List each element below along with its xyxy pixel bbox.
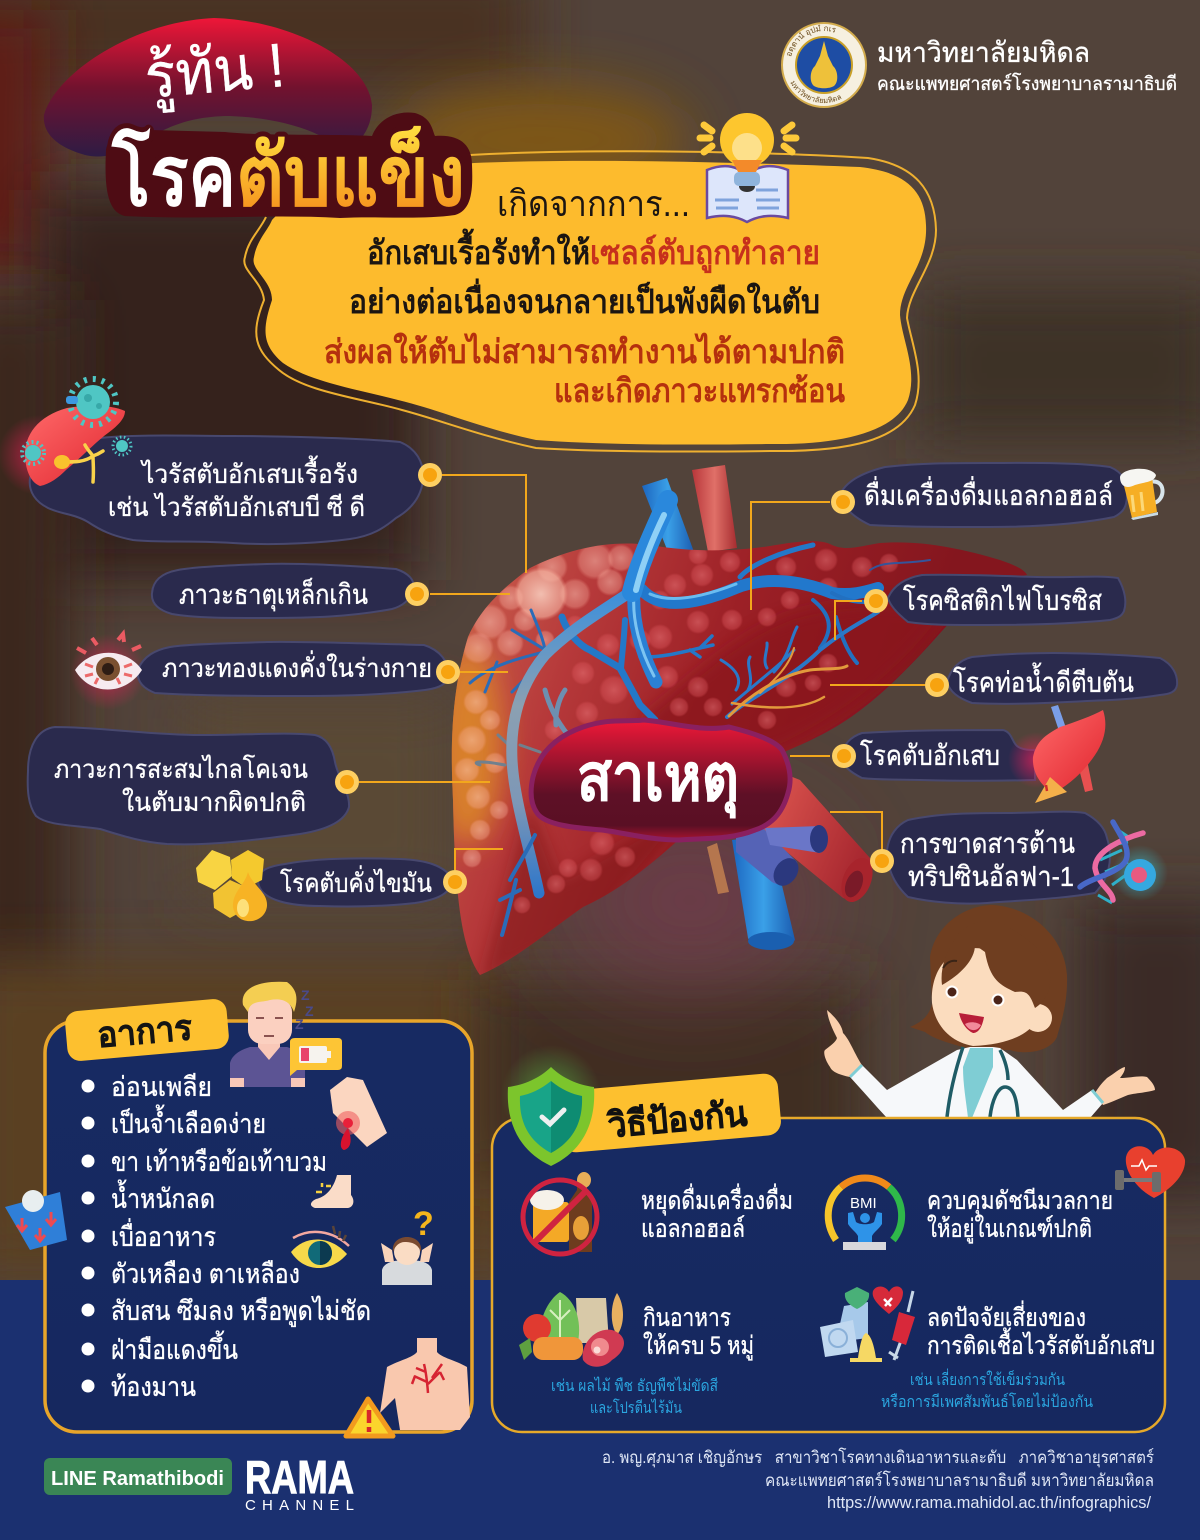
- university logo: [781, 22, 867, 108]
- icon: red eye: [75, 634, 142, 690]
- icon: tired person: Z: [305, 1003, 314, 1019]
- cause: fatty liver: [196, 850, 467, 921]
- icon: confused person: ?: [413, 1205, 434, 1243]
- prevention item: reduce hepatitis risk: ลดปัจจัยเสี่ยงของ: [927, 1300, 1086, 1332]
- icon: beer mug: [1120, 469, 1163, 520]
- prevention item: BMI: ควบคุมดัชนีมวลกาย: [927, 1187, 1113, 1216]
- symptom bullet list: ตัวเหลือง ตาเหลือง: [111, 1259, 300, 1289]
- coat: [850, 1047, 1103, 1118]
- tab: อาการ: [64, 998, 230, 1062]
- cause: hepatitis: [832, 705, 1105, 803]
- icon: liver with virus: [22, 379, 131, 486]
- heading: รู้ทัน !: รู้ทัน !: [142, 31, 288, 114]
- yellow cause panel: [244, 151, 936, 452]
- university name: คณะแพทยศาสตร์โรงพยาบาลรามาธิบดี: [877, 72, 1177, 95]
- icon: tired person: [230, 982, 342, 1087]
- liver body: [452, 541, 1027, 975]
- icon: warning triangle: [346, 1399, 393, 1436]
- icon: yellow eye: [291, 1226, 349, 1268]
- prevention item: food groups: [519, 1292, 754, 1417]
- university name: [877, 37, 1177, 95]
- cause: iron overload: [152, 564, 429, 618]
- prevention item: BMI: [828, 1146, 1185, 1250]
- icon: DNA and cell: [1080, 822, 1168, 903]
- callout: สาเหตุ: [531, 720, 790, 840]
- liver shading and lobules: [452, 544, 898, 974]
- icon: BMI gauge: [828, 1178, 902, 1250]
- icon: weight scale: [5, 1190, 67, 1250]
- cause: glycogen storage: ในตับมากผิดปกติ: [122, 787, 306, 817]
- scrubs: [963, 1048, 993, 1118]
- prevention item: stop alcohol: [523, 1172, 793, 1254]
- cause text block: [324, 183, 845, 409]
- connector lines: [359, 475, 925, 870]
- prevention item: reduce hepatitis risk: เช่น เลี่ยงการใช้เข็มร่วมกัน: [910, 1368, 1065, 1389]
- symptom bullet list: [82, 1072, 371, 1402]
- pointing hand: [824, 1010, 862, 1077]
- icon: no alcohol: [523, 1172, 597, 1254]
- aorta top: [692, 465, 737, 552]
- heading: โรคตับแข็ง: ตับแข็ง: [236, 125, 465, 223]
- tab: วิธีป้องกัน: [558, 1073, 782, 1153]
- face: [932, 948, 1036, 1046]
- icon: risk reduction: [820, 1286, 915, 1362]
- cause: glycogen storage: [28, 727, 359, 844]
- lower blue vein: [732, 835, 795, 949]
- icon: chest with spider veins: [380, 1338, 470, 1430]
- cause: glycogen storage: ภาวะการสะสมไกลโคเจน: [54, 754, 308, 784]
- cause text block: เกิดจากการ...: [497, 183, 690, 224]
- icon: swollen foot: [311, 1175, 353, 1208]
- RAMA Channel logo: [245, 1451, 354, 1514]
- doctor illustration: [824, 905, 1155, 1118]
- icon: BMI gauge: BMI: [850, 1195, 877, 1212]
- cause: iron overload: ภาวะธาตุเหล็กเกิน: [179, 577, 368, 612]
- panel: prevention: [492, 1045, 1185, 1432]
- open hand: [1095, 1067, 1155, 1105]
- LINE badge: [44, 1458, 232, 1495]
- cause: alcohol: ดื่มเครื่องดื่มแอลกอฮอล์: [864, 476, 1113, 511]
- cause text block: และเกิดภาวะแทรกซ้อน: [554, 372, 845, 409]
- symptom bullet list: สับสน ซึมลง หรือพูดไม่ชัด: [111, 1296, 371, 1327]
- liver illustration: [434, 465, 1027, 985]
- icon: healthy food: [519, 1292, 624, 1367]
- vena cava top: [642, 478, 694, 552]
- stethoscope: [947, 1047, 1018, 1118]
- credits: https://www.rama.mahidol.ac.th/infographics/: [827, 1493, 1151, 1512]
- prevention item: food groups: ให้ครบ 5 หมู่: [643, 1331, 754, 1361]
- symptom bullet list: เป็นจ้ำเลือดง่าย: [111, 1104, 266, 1139]
- prevention item: stop alcohol: แอลกอฮอล์: [641, 1215, 745, 1243]
- credits: คณะแพทยศาสตร์โรงพยาบาลรามาธิบดี มหาวิทยาลัยมหิดล: [765, 1470, 1154, 1490]
- credits: [602, 1447, 1154, 1512]
- icon: bruised hand: [330, 1077, 387, 1150]
- cause: cystic fibrosis: โรคซิสติกไฟโบรซิส: [903, 584, 1102, 616]
- cause: alpha-1 antitrypsin deficiency: ทริปซินอัลฟา-1: [908, 861, 1074, 892]
- cause text block: อย่างต่อเนื่องจนกลายเป็นพังผืดในตับ: [349, 278, 820, 320]
- tab: วิธีป้องกัน: วิธีป้องกัน: [605, 1094, 749, 1146]
- symptom bullet list: น้ำหนักลด: [111, 1179, 215, 1214]
- icon: tired person: Z: [301, 987, 310, 1003]
- icon: liver with warning: [1008, 705, 1105, 803]
- cause: hepatitis: โรคตับอักเสบ: [860, 739, 1000, 771]
- symptom bullet list: ฝ่ามือแดงขึ้น: [111, 1330, 238, 1365]
- university logo: อตฺตานํ อุปมํ กเร: [787, 24, 836, 56]
- brown bile duct: [707, 843, 729, 894]
- cause: alpha-1 antitrypsin deficiency: การขาดสารต้าน: [900, 828, 1075, 859]
- cause text block: ส่งผลให้ตับไม่สามารถทำงานได้ตามปกติ: [324, 332, 845, 370]
- cause: alcohol: [831, 463, 1163, 527]
- heading: โรคตับแข็ง: โรค: [111, 128, 236, 223]
- cause: alpha-1 antitrypsin deficiency: [870, 812, 1168, 904]
- RAMA Channel logo: RAMA: [245, 1451, 354, 1503]
- symptom bullet list: ขา เท้าหรือข้อเท้าบวม: [111, 1147, 327, 1177]
- heading: โรคตับแข็ง: [106, 112, 472, 223]
- prevention item: BMI: ให้อยู่ในเกณฑ์ปกติ: [927, 1214, 1092, 1244]
- panel: symptoms: [5, 982, 472, 1436]
- tab: อาการ: อาการ: [96, 1008, 194, 1055]
- icon: confused person: [381, 1205, 434, 1285]
- title banner shape: [44, 18, 372, 156]
- back hair: [910, 905, 1067, 1052]
- icon: light bulb and book: [700, 113, 796, 222]
- cause: biliary obstruction: โรคท่อน้ำดีตีบตัน: [953, 662, 1134, 698]
- prevention item: reduce hepatitis risk: การติดเชื้อไวรัสตับอักเสบ: [927, 1327, 1155, 1360]
- cause: copper accumulation: [70, 634, 460, 710]
- prevention item: reduce hepatitis risk: หรือการมีเพศสัมพันธ์โดยไม่ป้องกัน: [881, 1392, 1093, 1411]
- icon: shield: [508, 1067, 594, 1166]
- icon: heart with dumbbell: [1115, 1146, 1185, 1198]
- lower red artery: [760, 770, 872, 899]
- prevention item: stop alcohol: หยุดดื่มเครื่องดื่ม: [641, 1183, 793, 1216]
- cause: fatty liver: โรคตับคั่งไขมัน: [280, 865, 432, 898]
- eyes and mouth: [943, 961, 1004, 1033]
- cause: biliary obstruction: [925, 653, 1177, 704]
- cause: copper accumulation: ภาวะทองแดงคั่งในร่างกาย: [162, 650, 432, 683]
- cause text block: เซลล์ตับถูกทำลาย: [590, 234, 820, 274]
- university logo: มหาวิทยาลัยมหิดล: [790, 80, 842, 104]
- cause: chronic viral hepatitis: [0, 379, 442, 544]
- RAMA Channel logo: CHANNEL: [245, 1497, 354, 1514]
- cause text block: อักเสบเรื้อรังทำให้: [367, 228, 590, 271]
- cause: chronic viral hepatitis: ไวรัสตับอักเสบเรื้อรัง: [140, 455, 358, 489]
- symptom bullet list: เบื่ออาหาร: [111, 1218, 216, 1252]
- symptom bullet list: ท้องมาน: [111, 1372, 196, 1402]
- university name: มหาวิทยาลัยมหิดล: [877, 37, 1090, 68]
- prevention item: food groups: เช่น ผลไม้ พืช ธัญพืชไม่ขัดสี: [551, 1376, 718, 1395]
- prevention item: food groups: กินอาหาร: [643, 1304, 731, 1332]
- lower purple veins: [736, 825, 797, 884]
- cause: chronic viral hepatitis: เช่น ไวรัสตับอักเสบบี ซี ดี: [108, 492, 365, 522]
- icon: fat honeycomb: [196, 850, 267, 921]
- prevention item: food groups: และโปรตีนไร้มัน: [590, 1398, 682, 1417]
- LINE badge: LINE Ramathibodi: [51, 1468, 224, 1490]
- front hair: [942, 921, 1050, 1008]
- icon: tired person: Z: [295, 1016, 304, 1032]
- callout: สาเหตุ: สาเหตุ: [577, 740, 739, 819]
- hepatic veins: [470, 500, 930, 935]
- symptom bullet list: อ่อนเพลีย: [111, 1072, 212, 1102]
- cause: cystic fibrosis: [864, 575, 1125, 625]
- prevention item: reduce hepatitis risk: [820, 1286, 1155, 1411]
